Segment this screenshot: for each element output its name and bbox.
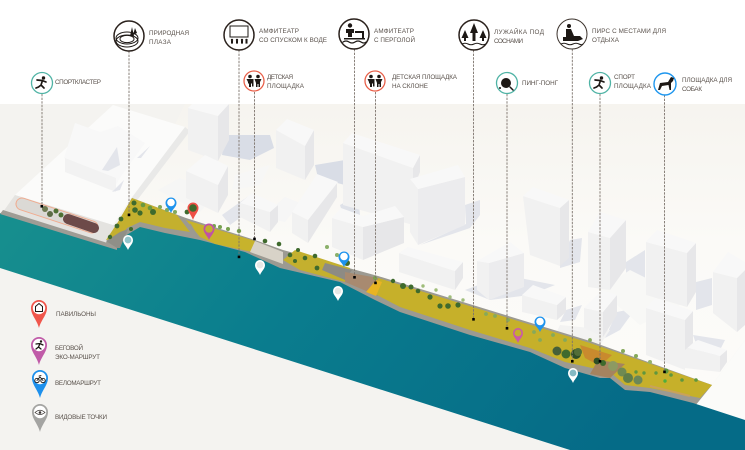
legend: running eco route: ЭКО-МАРШРУТ [55,354,100,361]
icon label: sport cluster [32,72,101,94]
icon label: amphitheatre with pergola: АМФИТЕАТР [374,28,414,35]
icon label: sport ground: СПОРТ [614,74,635,81]
icon label: sport ground [590,72,652,94]
icon label: children playground [244,71,305,91]
waterfront park [106,198,712,398]
legend: running eco route [31,337,100,365]
icon label: dog park: СОБАК [682,86,702,93]
icon label: sport ground: ПЛОЩАДКА [614,83,652,90]
icon label: children playground: ПЛОЩАДКА [267,83,305,90]
icon label: natural plaza: ПЛАЗА [149,39,172,46]
icon label: lawn under pines: ЛУЖАЙКА ПОД [494,27,545,36]
page background [0,104,745,450]
icon label: slope playground: НА СКЛОНЕ [392,83,428,90]
shore base under the park [104,198,712,406]
icon label: ping-pong [496,72,559,94]
buildings [186,104,745,372]
icon label: dog park: ПЛОЩАДКА ДЛЯ [682,77,732,84]
icon label: natural plaza [114,21,189,51]
icon label: slope playground [365,71,458,91]
trees [108,200,698,384]
icon label: amphitheatre with steps to water: АМФИТЕАТР [259,28,299,35]
icon label: lawn under pines: СОСНАМИ [494,38,523,45]
icon label: amphitheatre with steps to water [224,20,327,50]
icon label: pier with seating [557,19,666,49]
icon label: amphitheatre with steps to water: СО СПУСКОМ К ВОДЕ [259,37,327,44]
ground plane with city [3,104,745,450]
map pins [123,198,578,383]
icon label: amphitheatre with pergola: С ПЕРГОЛОЙ [374,35,415,44]
legend: viewpoints: ВИДОВЫЕ ТОЧКИ [55,414,107,421]
icon label: sport cluster: СПОРТКЛАСТЕР [55,79,101,86]
icon label: dog park [654,73,732,95]
legend: running eco route: БЕГОВОЙ [55,343,83,352]
legend: pavilions: ПАВИЛЬОНЫ [56,311,96,318]
icon label: pier with seating: ОТДЫХА [592,37,620,44]
icon label: pier with seating: ПИРС С МЕСТАМИ ДЛЯ [592,28,666,35]
legend: cycling route: ВЕЛОМАРШРУТ [55,380,101,387]
legend [31,300,107,432]
leader lines to park features [40,49,666,373]
icon label: children playground: ДЕТСКАЯ [267,74,293,81]
icon label: amphitheatre with pergola [339,19,415,49]
sports cluster [0,204,117,250]
icon label: natural plaza: ПРИРОДНАЯ [149,30,189,37]
icon label: slope playground: ДЕТСКАЯ ПЛОЩАДКА [392,74,458,81]
water [0,213,745,450]
icon label: ping-pong: ПИНГ-ПОНГ [522,80,559,87]
icon label: lawn under pines [459,20,545,50]
